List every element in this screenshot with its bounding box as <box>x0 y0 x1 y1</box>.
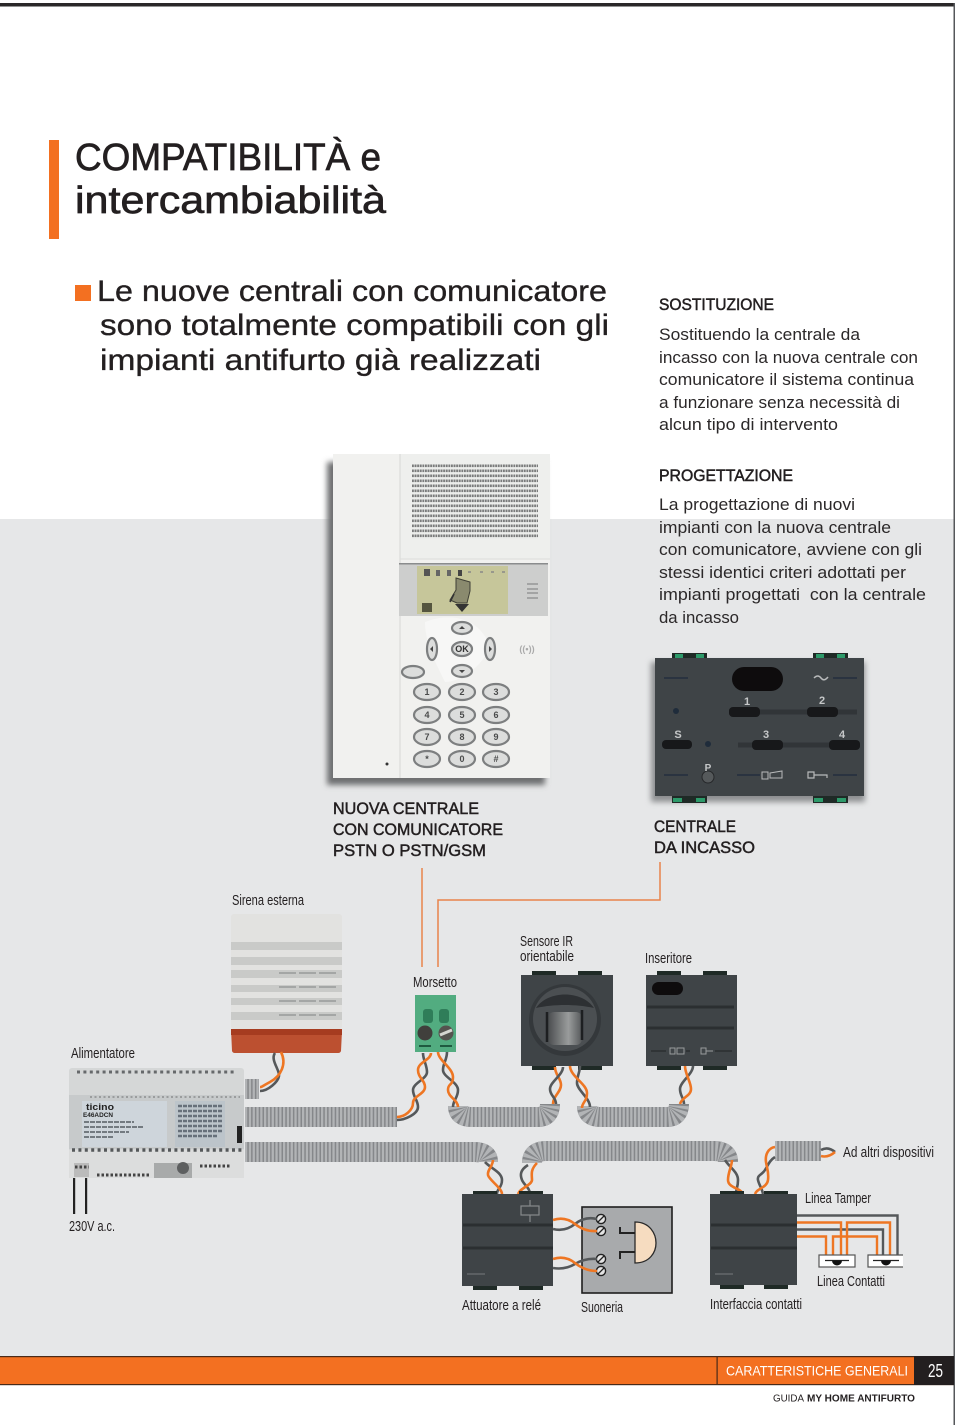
text block: progettazione <box>659 467 926 627</box>
text block: sostituzione: SOSTITUZIONE <box>659 296 774 314</box>
keypad <box>386 617 535 767</box>
device: inseritore <box>646 971 737 1070</box>
subtitle: sono totalmente compatibili con gli <box>100 309 609 342</box>
label: 230V a.c.: 230V a.c. <box>69 1219 115 1235</box>
device: centrale da incasso <box>651 653 865 803</box>
device: centrale da incasso: 2 <box>819 695 825 707</box>
label: ad altri dispositivi: Ad altri dispositivi <box>843 1145 934 1161</box>
device: nuova centrale con comunicatore <box>327 454 550 785</box>
label: centrale da incasso <box>654 817 755 857</box>
title: COMPATIBILITÀ e <box>75 136 381 179</box>
label: centrale da incasso: CENTRALE <box>654 817 736 836</box>
device: attuatore a relé <box>462 1191 553 1290</box>
keypad: ((•)) <box>519 644 535 654</box>
label: nuova centrale: NUOVA CENTRALE <box>333 799 479 818</box>
device: alimentatore: ticino <box>86 1102 115 1112</box>
wires: attuatore to suoneria <box>553 1218 597 1271</box>
text block: progettazione: La progettazione di nuovi <box>659 495 855 514</box>
label: sirena esterna: Sirena esterna <box>232 893 305 909</box>
label: inseritore: Inseritore <box>645 951 692 967</box>
text block: progettazione: con comunicatore, avviene con gli <box>659 540 922 559</box>
wires: linea tamper e contatti <box>797 1216 898 1255</box>
label: nuova centrale: CON COMUNICATORE <box>333 820 503 839</box>
title: intercambiabilità <box>75 180 387 222</box>
footer guide title: MY HOME ANTIFURTO <box>807 1392 915 1404</box>
keypad: 9 <box>493 732 499 742</box>
subtitle: Le nuove centrali con comunicatore <box>97 275 607 308</box>
footer band: 25 <box>928 1361 943 1381</box>
device: centrale da incasso: 1 <box>744 696 750 708</box>
text block: progettazione: da incasso <box>659 608 739 627</box>
footer band <box>0 1356 954 1385</box>
device: centrale da incasso: 3 <box>763 729 769 741</box>
text block: sostituzione: alcun tipo di intervento <box>659 415 838 434</box>
keypad: * <box>425 754 429 764</box>
keypad: 2 <box>459 687 465 697</box>
text block: sostituzione <box>659 296 918 434</box>
device: alimentatore: E46ADCN <box>83 1113 113 1119</box>
text block: progettazione: impianti con la nuova centrale <box>659 518 891 537</box>
label: interfaccia contatti: Interfaccia contatti <box>710 1297 802 1313</box>
device: suoneria <box>582 1207 672 1293</box>
text block: sostituzione: a funzionare senza necessità di <box>659 393 900 412</box>
contact sensors <box>819 1255 903 1267</box>
text block: sostituzione: comunicatore il sistema continua <box>659 370 915 389</box>
label: linea tamper: Linea Tamper <box>805 1191 871 1207</box>
device: sensore IR <box>521 971 613 1070</box>
keypad: 3 <box>493 687 499 697</box>
label: suoneria: Suoneria <box>581 1300 624 1316</box>
keypad: # <box>493 754 499 764</box>
text block: progettazione: impianti progettati con la centrale <box>659 585 926 604</box>
subtitle <box>75 275 609 377</box>
label: attuatore a relé: Attuatore a relé <box>462 1298 541 1314</box>
footer band: CARATTERISTICHE GENERALI <box>726 1362 908 1378</box>
keypad: 4 <box>424 710 430 720</box>
label: alimentatore: Alimentatore <box>71 1046 135 1062</box>
label: morsetto: Morsetto <box>413 975 457 991</box>
label: nuova centrale <box>333 799 503 860</box>
device: interfaccia contatti <box>710 1191 797 1289</box>
keypad: 0 <box>459 754 465 764</box>
text block: sostituzione: incasso con la nuova centrale con <box>659 348 918 367</box>
display <box>399 563 548 616</box>
label: centrale da incasso: DA INCASSO <box>654 838 755 857</box>
label: sensore IR orientabile: Sensore IR <box>520 934 573 950</box>
keypad: 8 <box>459 732 465 742</box>
keypad: 6 <box>493 710 499 720</box>
gray background band <box>0 519 954 1357</box>
conduits <box>245 1089 821 1163</box>
label: sensore IR orientabile: orientabile <box>520 949 574 965</box>
device: centrale da incasso: S <box>674 729 682 741</box>
text block: progettazione: stessi identici criteri adottati per <box>659 563 906 582</box>
speaker grille <box>412 464 538 539</box>
device: morsetto <box>415 995 456 1052</box>
device: sirena esterna <box>231 914 342 1053</box>
footer guide title: GUIDA <box>773 1392 804 1404</box>
device: centrale da incasso: 4 <box>839 729 846 741</box>
subtitle: impianti antifurto già realizzati <box>100 344 541 377</box>
connector lines to morsetto <box>422 862 660 967</box>
title <box>49 136 387 239</box>
keypad: OK <box>455 644 469 654</box>
label: sensore IR orientabile <box>520 934 574 965</box>
label: linea contatti: Linea Contatti <box>817 1274 885 1290</box>
keypad: 5 <box>459 710 465 720</box>
keypad: 1 <box>424 687 430 697</box>
label: nuova centrale: PSTN O PSTN/GSM <box>333 841 486 860</box>
twisted wires <box>260 1052 835 1194</box>
device: centrale da incasso: P <box>705 763 712 774</box>
text block: progettazione: PROGETTAZIONE <box>659 467 793 485</box>
device: alimentatore <box>69 1068 244 1214</box>
keypad: 7 <box>424 732 430 742</box>
text block: sostituzione: Sostituendo la centrale da <box>659 325 861 344</box>
